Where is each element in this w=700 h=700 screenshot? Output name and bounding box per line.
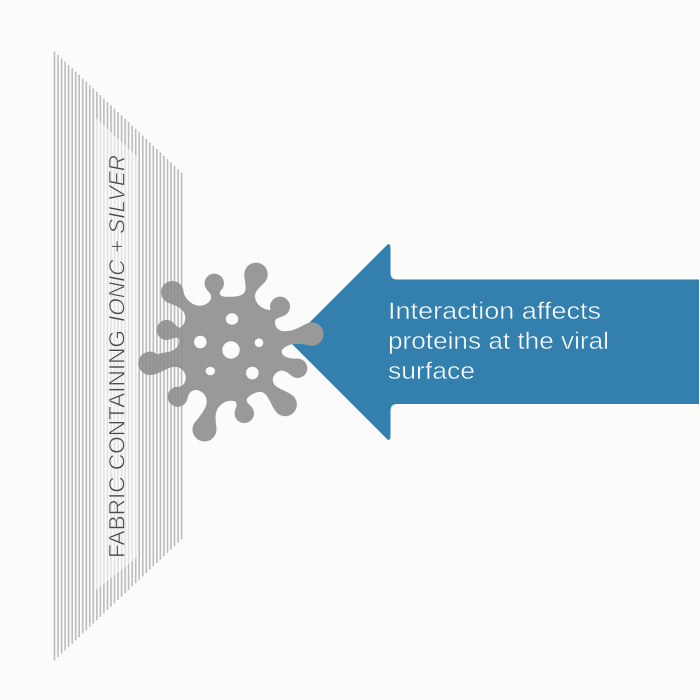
fabric label: IONIC + SILVER (104, 155, 130, 322)
fabric label: FABRIC CONTAINING (104, 330, 130, 558)
arrow text: surface (388, 358, 475, 385)
icon: virus (138, 263, 324, 441)
fabric label (104, 155, 130, 558)
arrow (290, 244, 699, 440)
arrow text: proteins at the viral (388, 328, 609, 355)
arrow text (388, 298, 609, 385)
arrow text: Interaction affects (388, 298, 601, 325)
panel: striped fabric (54, 52, 182, 660)
